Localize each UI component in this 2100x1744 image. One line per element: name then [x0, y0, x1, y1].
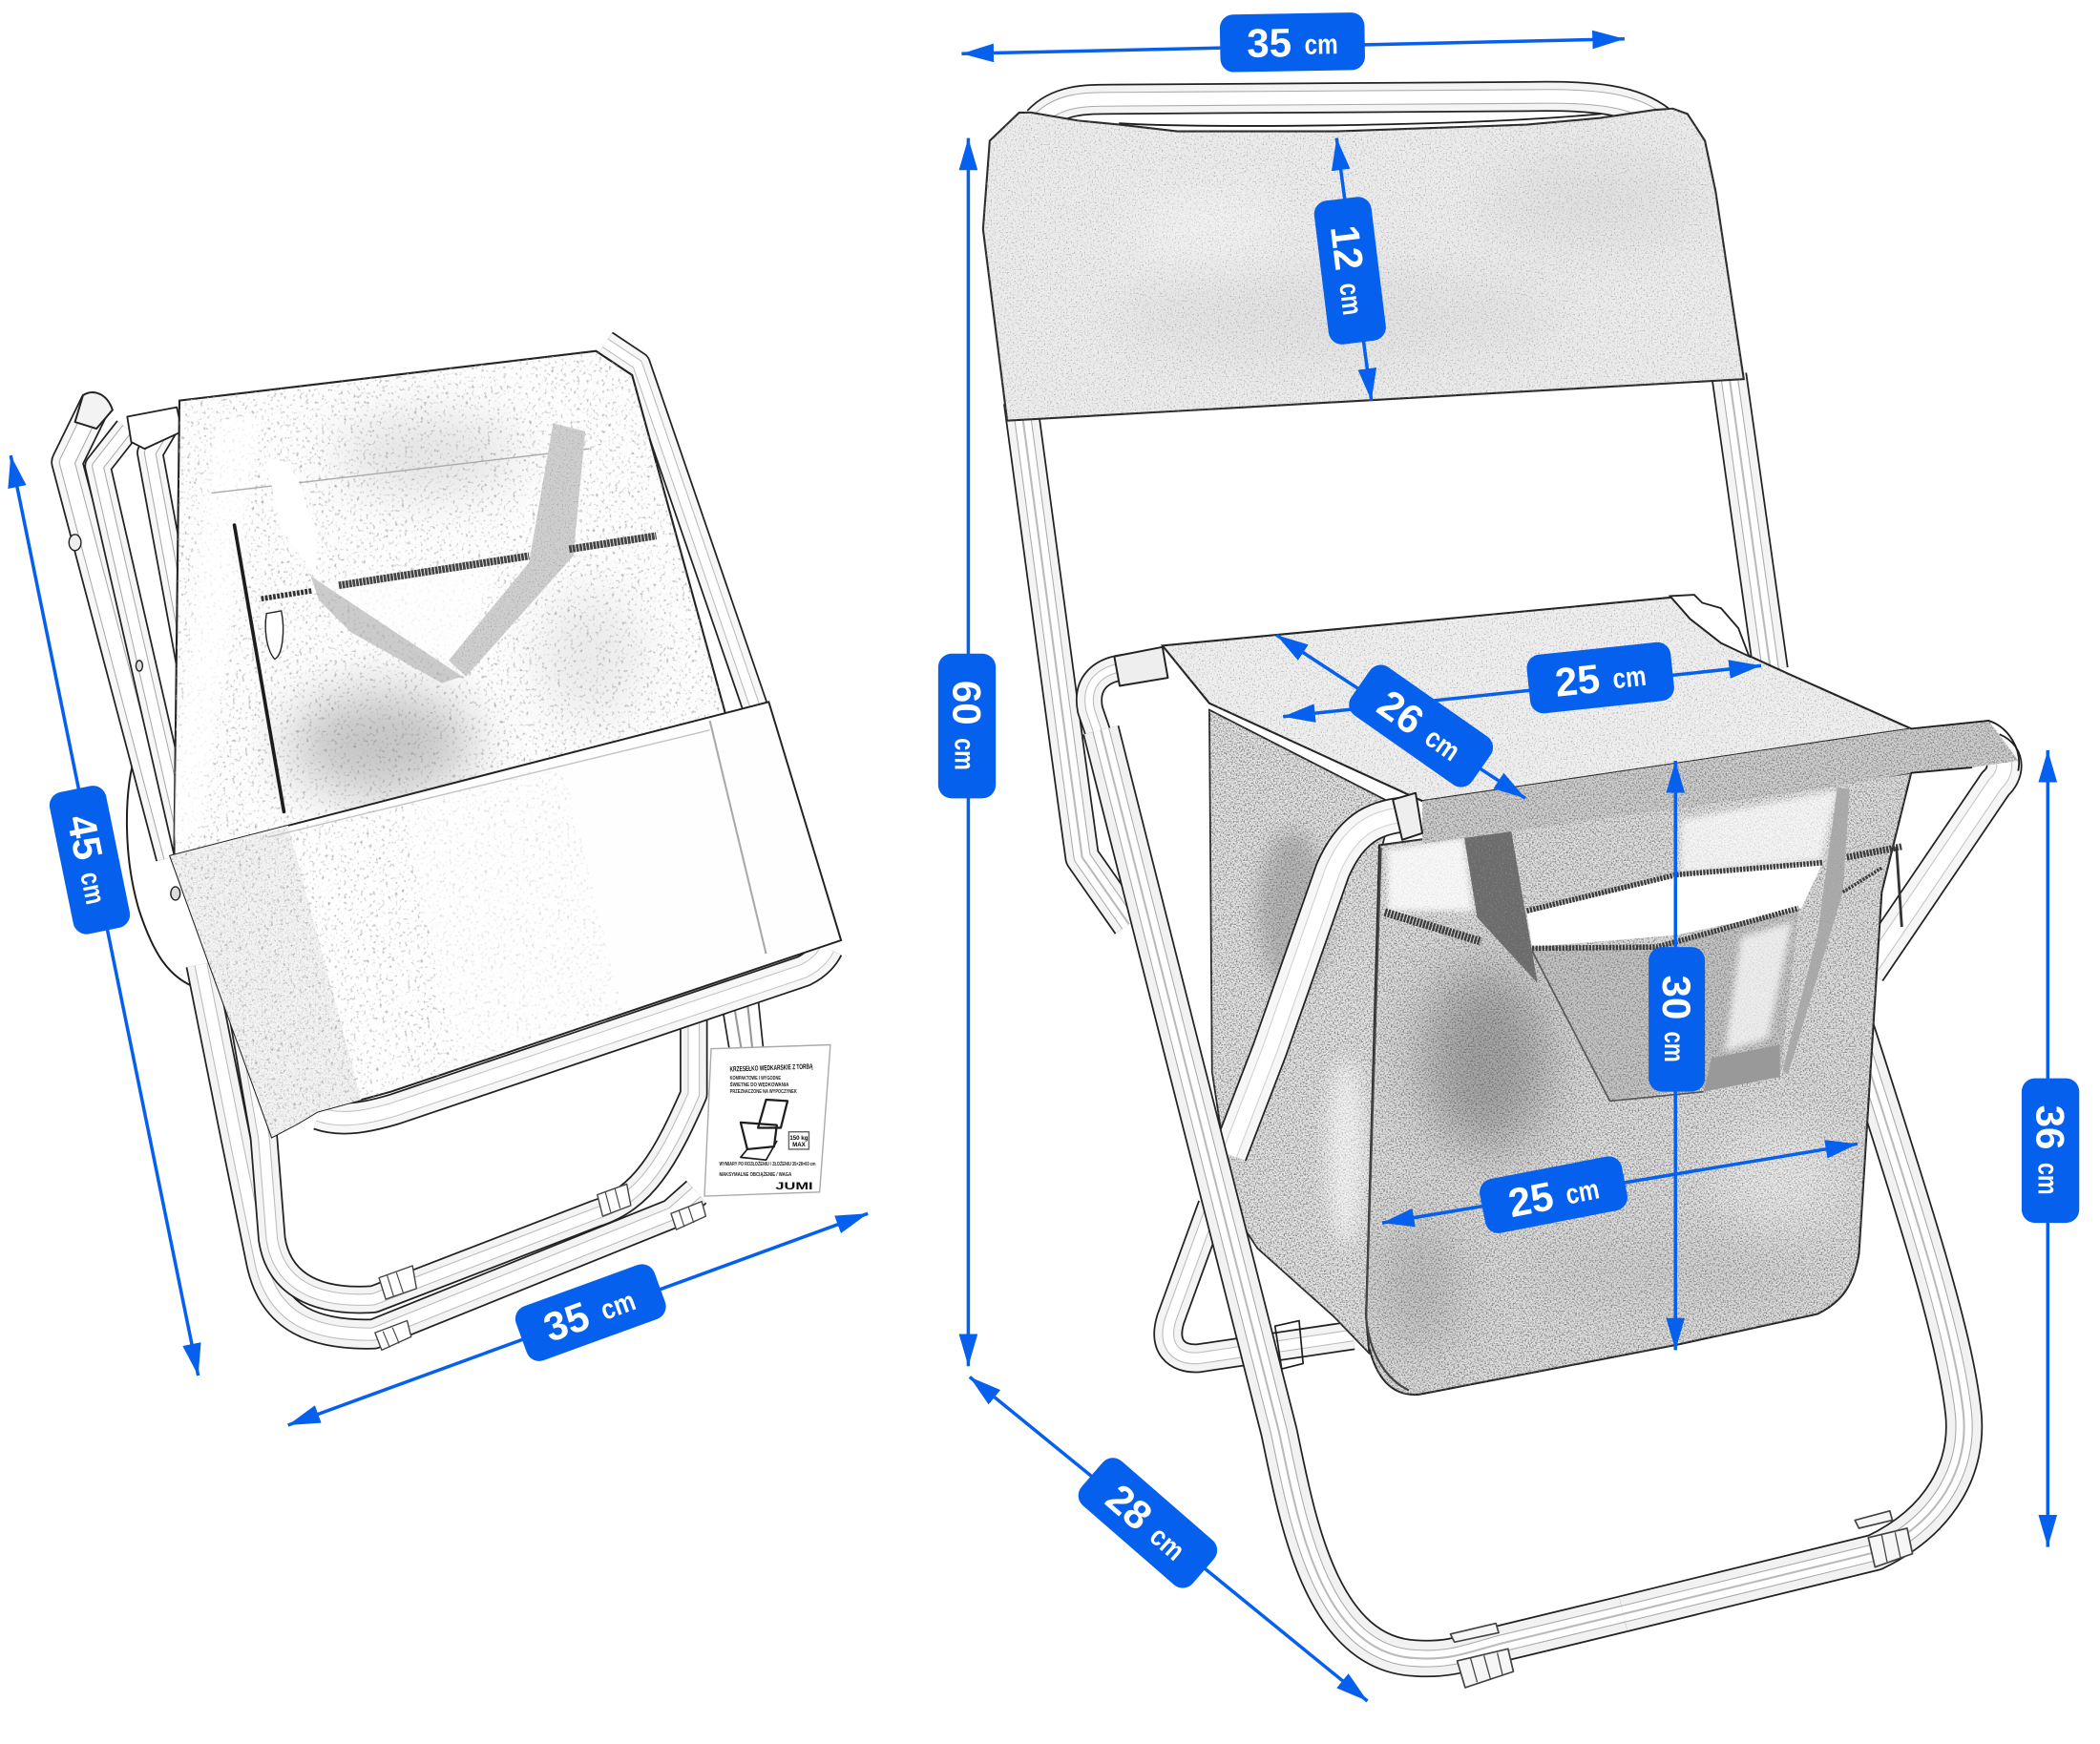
badge: cm — [1563, 1173, 1602, 1210]
main frame right leg and foot bar — [1624, 1024, 1964, 1614]
tag title: KRZESEŁKO WĘDKARSKIE Z TORBĄ — [729, 1062, 813, 1074]
backrest top tube — [1038, 96, 1661, 126]
dimension: seat depth 26 cm — [1276, 635, 1525, 798]
badge — [2022, 1079, 2079, 1223]
badge — [1312, 196, 1387, 346]
arrow — [961, 39, 1625, 53]
bag front panel — [1366, 773, 1911, 1395]
badge: 30 — [1654, 976, 1699, 1019]
badge — [512, 1260, 670, 1365]
left chair (folded view) — [67, 343, 841, 1350]
tag footer: WYMIARY PO ROZŁOŻENIU / ZŁOŻENIU 35×28×60 cm — [719, 1161, 816, 1167]
backrest fabric — [983, 109, 1744, 421]
right chair (open view) — [983, 96, 2019, 1688]
bag handle — [266, 423, 585, 683]
arrow — [970, 1376, 1368, 1701]
tag load badge — [788, 1132, 808, 1149]
left strap — [1464, 828, 1538, 983]
badge — [47, 784, 133, 936]
arrow — [1674, 761, 1676, 1350]
dimension: seat width 25 cm — [1283, 641, 1761, 717]
badge: 45 — [58, 810, 112, 864]
badge: cm — [1658, 1031, 1690, 1062]
arrow — [10, 455, 199, 1376]
arrow — [1382, 1144, 1858, 1223]
arrow — [2047, 750, 2049, 1547]
badge — [1344, 660, 1499, 792]
badge: cm — [74, 870, 111, 907]
right strap — [1782, 788, 1850, 1074]
foot rings and caps — [375, 1184, 705, 1350]
badge: 35 — [537, 1293, 595, 1351]
foot caps — [1451, 1511, 1913, 1688]
tag load badge: MAX — [792, 1142, 807, 1148]
dimension: chair depth 28 cm — [970, 1376, 1368, 1701]
arrow — [1336, 138, 1372, 401]
dimension: bag height 30 cm — [1648, 761, 1705, 1350]
badge: 35 — [1247, 20, 1292, 66]
arrow — [967, 138, 970, 1366]
badge: 25 — [1553, 656, 1602, 705]
badge: cm — [1304, 29, 1338, 61]
tag product icon — [741, 1100, 788, 1160]
badge: cm — [2031, 1163, 2063, 1195]
badge: 36 — [2027, 1105, 2072, 1149]
badge: 60 — [944, 681, 989, 725]
seat tube under fabric band — [319, 948, 828, 1119]
tag logo: JUMI — [775, 1181, 813, 1192]
dimension: total height 60 cm — [938, 138, 996, 1366]
hang tag — [704, 1044, 830, 1196]
folded frame tubes — [67, 343, 761, 857]
dimension: left chair height 45 cm — [10, 455, 199, 1376]
fabric hinge at top of tubes — [127, 408, 182, 449]
arrow — [288, 1213, 868, 1425]
tag description: ŚWIETNE DO WĘDKOWANIA — [730, 1082, 789, 1088]
rear small frame — [1168, 1206, 1353, 1369]
handle bottom strap — [1704, 1044, 1780, 1092]
seat left joint — [1114, 647, 1167, 685]
upper light patch — [1681, 790, 1838, 873]
badge: cm — [1419, 722, 1465, 767]
badge — [1525, 641, 1675, 715]
badge: cm — [597, 1285, 640, 1327]
arrow — [1276, 635, 1525, 798]
badge: cm — [948, 738, 979, 770]
badge: 25 — [1504, 1173, 1557, 1226]
rear joint — [1670, 595, 1749, 657]
seat front bar — [1422, 721, 2019, 844]
arrow — [1283, 665, 1761, 717]
lower fabric band — [170, 702, 841, 1137]
zippers — [1385, 847, 1901, 948]
right side brace — [1868, 750, 2005, 971]
badge: 12 — [1322, 222, 1372, 273]
dimension: backrest width 35 cm — [961, 12, 1625, 73]
badge: cm — [1144, 1521, 1190, 1566]
tag description: PRZEZNACZONE NA WYPOCZYNEK — [730, 1089, 797, 1095]
bag zipper — [235, 525, 657, 811]
seat fabric — [1163, 598, 1911, 801]
badge: cm — [1611, 661, 1648, 695]
dimension: left chair width 35 cm — [288, 1213, 868, 1425]
dimension: backrest height 12 cm — [1312, 138, 1387, 401]
tube cap — [75, 392, 113, 429]
badge — [1648, 947, 1705, 1092]
upper fabric panel with bag — [167, 351, 730, 857]
badge — [1073, 1452, 1223, 1593]
rear tubes above tag — [722, 998, 764, 1053]
backrest side tubes — [1020, 375, 1771, 924]
tag description — [730, 1076, 797, 1095]
badge: 28 — [1098, 1476, 1161, 1539]
badge: 26 — [1370, 681, 1432, 744]
left white pocket patch — [1388, 837, 1473, 911]
tag description: KOMPAKTOWE I WYGODNE — [730, 1076, 781, 1082]
tag load badge: 150 kg — [789, 1135, 808, 1142]
main frame left leg — [1089, 647, 1913, 1688]
bag side panel — [1209, 710, 1393, 1353]
bag bulge behind left tubes — [127, 750, 199, 989]
tag footer — [719, 1161, 816, 1178]
dimension: bag width 25 cm — [1382, 1144, 1858, 1235]
badge — [1478, 1154, 1629, 1235]
front left brace — [1229, 793, 1422, 1155]
bag seam — [1366, 848, 1409, 1390]
badge — [938, 654, 996, 798]
seat bottom frame — [200, 964, 764, 1350]
tag footer: MAKSYMALNE OBCIĄŻENIE / WAGA — [719, 1171, 792, 1178]
dimension: seat height 36 cm — [2022, 750, 2079, 1547]
badge — [1220, 12, 1365, 73]
inner handle loop — [1532, 911, 1798, 1101]
pocket opening — [1526, 863, 1823, 947]
badge: cm — [1333, 281, 1368, 317]
